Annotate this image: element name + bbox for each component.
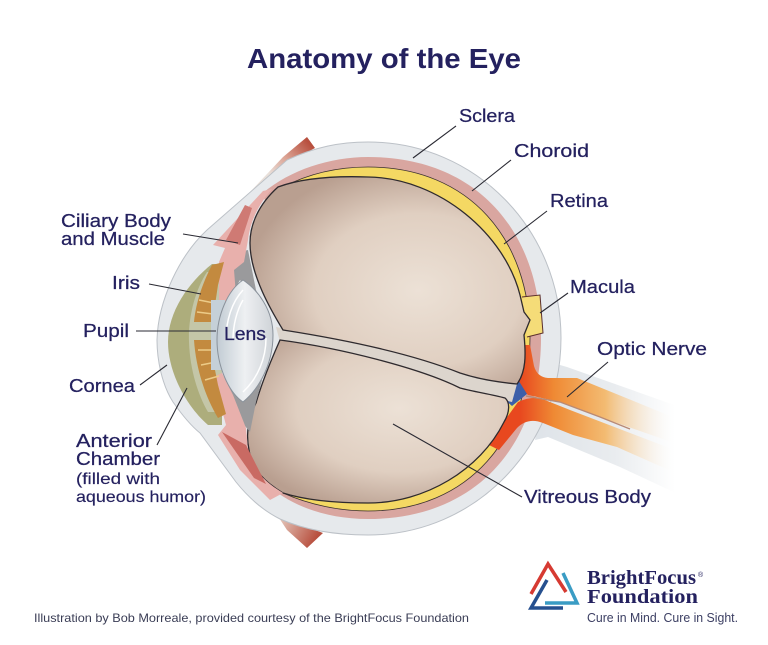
label: Anterior Chamber: Chamber [76,448,160,469]
credit: Illustration by Bob Morreale, provided courtesy of the BrightFocus Foundation [34,611,469,625]
logo wordmark: Cure in Mind. Cure in Sight. [587,610,738,625]
label: Ciliary Body and Muscle: and Muscle [61,228,165,249]
logo wordmark [587,567,738,625]
muscle: top [250,137,315,192]
label: Macula: Macula [570,276,636,297]
nerve: lower bundle [489,398,680,475]
retina [283,167,530,511]
leader lines [136,126,608,497]
macula bracket [522,295,543,337]
gap band between lobes [276,327,517,402]
label: Anterior Chamber [76,430,206,506]
eye illustration [157,137,680,548]
logo icon [531,564,577,608]
logo wordmark: ® [698,571,704,579]
label: Lens: Lens [224,323,266,344]
label: Retina: Retina [550,190,609,211]
nerve divider [526,396,630,429]
iris: top [194,262,224,322]
nerve: upper bundle [516,345,680,445]
choroid [263,157,541,519]
label: Iris: Iris [112,272,140,293]
logo wordmark: Foundation [587,586,699,608]
label: Cornea: Cornea [69,375,136,396]
label: Vitreous Body: Vitreous Body [524,486,652,507]
label: Optic Nerve: Optic Nerve [597,338,707,359]
iris: bottom [194,340,226,418]
vitreous body: upper lobe [250,177,530,384]
logo wordmark: BrightFocus [587,567,696,589]
label: Anterior Chamber: Anterior [76,430,152,451]
zonules [226,250,272,325]
sclera [157,142,561,535]
optic nerve sheath [535,365,680,495]
anterior chamber [168,264,222,425]
label: Pupil: Pupil [83,320,129,341]
label: Anterior Chamber: aqueous humor) [76,489,206,506]
label: Choroid: Choroid [514,140,589,161]
label: Anterior Chamber: (filled with [76,471,160,488]
label: Ciliary Body and Muscle: Ciliary Body [61,210,172,231]
label: Sclera: Sclera [459,105,516,126]
lens [217,280,273,402]
muscle: bottom [262,492,323,548]
ciliary body: bottom [213,373,283,500]
ciliary body: top [213,189,272,303]
pupil gap [211,300,225,370]
retinal vessels [503,378,527,406]
vitreous body: lower lobe [248,340,509,503]
label: Ciliary Body and Muscle [61,210,172,249]
title: Anatomy of the Eye [247,43,521,74]
